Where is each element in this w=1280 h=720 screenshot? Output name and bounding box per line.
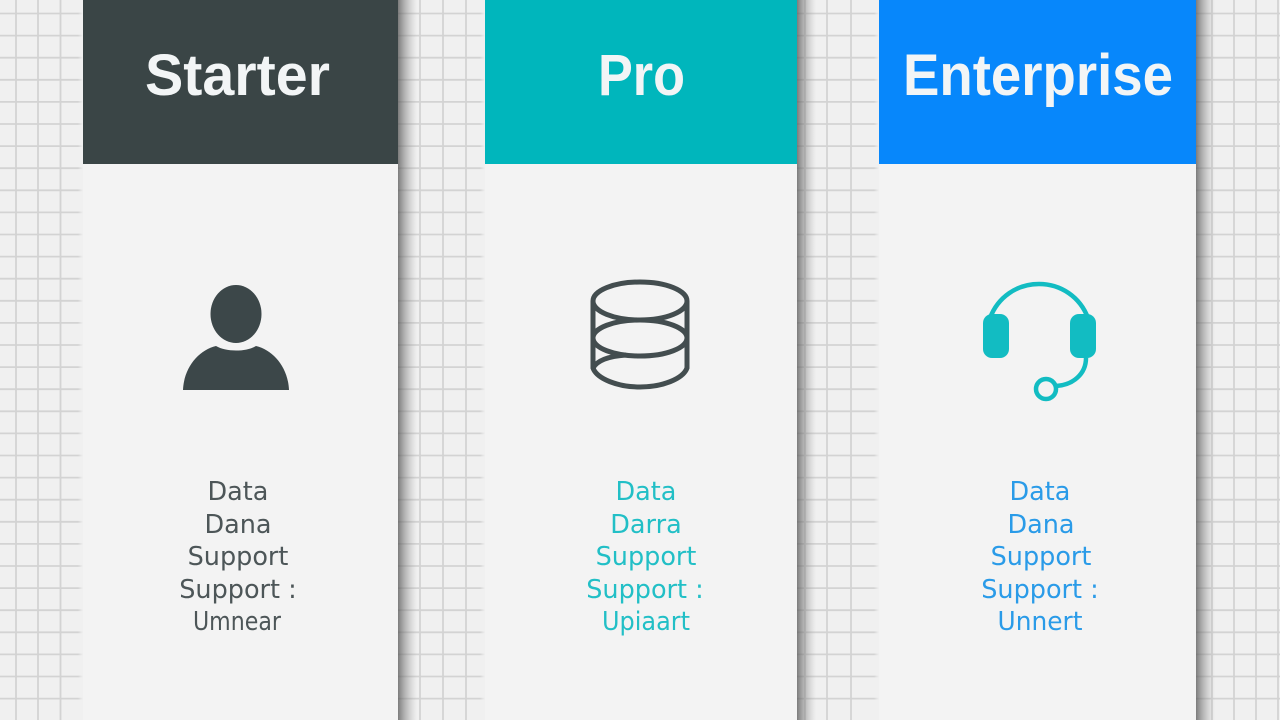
feature list: Enterprise: Support :: [981, 575, 1099, 605]
feature list: Starter: [179, 477, 297, 637]
header: Pro: Pro: [598, 43, 685, 108]
feature list: Pro: Darra: [610, 510, 682, 540]
feature list: Pro: [586, 477, 704, 637]
panel: Pro: [480, 0, 816, 720]
header: Starter: Starter: [145, 43, 330, 108]
icon: headset: [983, 284, 1096, 399]
feature list: Enterprise: [981, 477, 1099, 637]
feature list: Starter: Data: [208, 477, 268, 507]
panel: Enterprise: [874, 0, 1215, 720]
feature list: Enterprise: Dana: [1007, 510, 1075, 540]
feature list: Pro: Support: [596, 542, 696, 572]
feature list: Enterprise: Support: [991, 542, 1091, 572]
header: Enterprise: [879, 0, 1196, 164]
icon: person: [183, 285, 289, 390]
panel: Starter: [78, 0, 417, 720]
feature list: Pro: Support :: [586, 575, 704, 605]
feature list: Starter: Support: [188, 542, 288, 572]
feature list: Enterprise: Data: [1010, 477, 1070, 507]
feature list: Enterprise: Unnert: [998, 607, 1082, 637]
icon: database: [593, 282, 687, 387]
header: Starter: [83, 0, 398, 164]
feature list: Starter: Umnear: [193, 607, 281, 637]
feature list: Pro: Upiaart: [602, 607, 690, 637]
feature list: Starter: Dana: [204, 510, 272, 540]
feature list: Starter: Support :: [179, 575, 297, 605]
header: Pro: [485, 0, 797, 164]
feature list: Pro: Data: [616, 477, 676, 507]
header: Enterprise: Enterprise: [903, 43, 1173, 108]
